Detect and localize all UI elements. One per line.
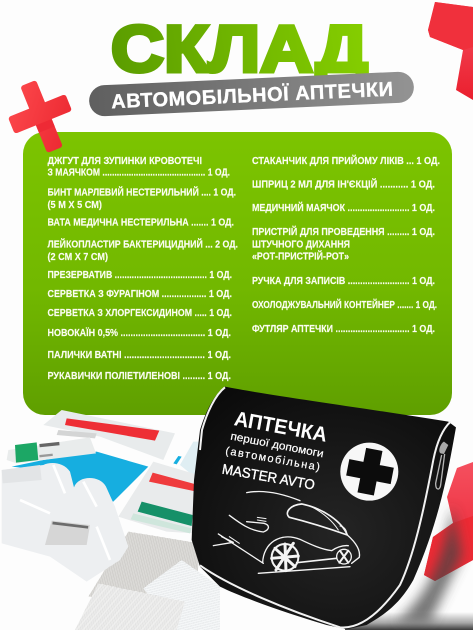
small package — [180, 442, 208, 480]
item: plaster: (2 СМ Х 7 СМ) — [48, 252, 108, 263]
item: medicine cup: СТАКАНЧИК ДЛЯ ПРИЙОМУ ЛІКІВ ... 1 ОД. — [252, 154, 440, 167]
bag body — [192, 387, 456, 629]
icon: red cross top right — [428, 2, 473, 100]
item: medical beacon: МЕДИЧНИЙ МАЯЧОК ......................... 1 ОД. — [252, 201, 435, 214]
item: resuscitation device: ПРИСТРІЙ ДЛЯ ПРОВЕДЕННЯ ......... 1 ОД. — [252, 225, 435, 238]
item: novocaine: НОВОКАЇН 0,5% .................................. 1 ОД. — [48, 326, 231, 339]
paper: instructions back — [88, 532, 200, 600]
icon: medical cross circle — [340, 443, 398, 501]
item: tourniquet — [48, 156, 230, 178]
item: pen: РУЧКА ДЛЯ ЗАПИСІВ ......................... 1 ОД. — [252, 276, 435, 287]
text block: right column — [252, 154, 440, 335]
title: СКЛАД — [111, 12, 368, 86]
item: syringe: ШПРИЦ 2 МЛ ДЛЯ ІН'ЄКЦІЙ ........... 1 ОД. — [252, 178, 435, 190]
item: gloves: РУКАВИЧКИ ПОЛІЕТИЛЕНОВІ ......... 1 ОД. — [48, 371, 231, 382]
illustration: first aid bag — [192, 387, 456, 629]
item: cotton wool: ВАТА МЕДИЧНА НЕСТЕРИЛЬНА ....... 1 ОД. — [48, 218, 234, 228]
illustration: kit contents — [2, 410, 220, 630]
item: tourniquet: З МАЯЧКОМ ........................................... 1 ОД. — [48, 168, 230, 178]
bag brand: MASTER AVTO — [221, 461, 316, 493]
item: chlorhexidine wipe: СЕРВЕТКА З ХЛОРГЕКСИДИНОМ ..... 1 ОД. — [48, 308, 232, 319]
gloves — [2, 463, 128, 582]
bag subheading: першої допомоги — [229, 430, 325, 460]
blue tab — [173, 456, 182, 464]
item: resuscitation device: ШТУЧНОГО ДИХАННЯ — [252, 240, 350, 250]
zipper pull — [436, 442, 448, 489]
item: gauze bandage — [48, 186, 236, 211]
item: case: ФУТЛЯР АПТЕЧКИ .............................. 1 ОД. — [252, 324, 435, 335]
subtitle pill: АВТОМОБІЛЬНОЇ АПТЕЧКИ — [111, 78, 393, 113]
panel: green contents list — [23, 132, 452, 415]
item: gauze bandage: (5 М Х 5 СМ) — [48, 200, 102, 211]
item: condom: ПРЕЗЕРВАТИВ ...................................... 1 ОД. — [48, 270, 232, 281]
package: red and green wipes — [118, 462, 198, 533]
bottom shadow band — [345, 612, 473, 630]
bandage package — [7, 437, 96, 463]
paper: instructions front — [75, 583, 185, 630]
item: gauze bandage: БИНТ МАРЛЕВИЙ НЕСТЕРИЛЬНИЙ .... 1 ОД. — [48, 186, 236, 198]
illustration: car — [213, 492, 360, 573]
paper: form — [143, 560, 220, 630]
item: plaster: ЛЕЙКОПЛАСТИР БАКТЕРИЦИДНИЙ ... 2 ОД. — [48, 238, 238, 250]
item: resuscitation device — [252, 225, 435, 262]
icon: red cross top left — [0, 72, 83, 162]
item: cotton swabs: ПАЛИЧКИ ВАТНІ ................................ 1 ОД. — [48, 350, 231, 361]
bag heading: АПТЕЧКА — [232, 407, 329, 447]
text block: left column — [48, 156, 238, 382]
blue sheet — [12, 452, 148, 502]
bag type: (автомобільна) — [224, 445, 321, 474]
item: tourniquet: ДЖГУТ ДЛЯ ЗУПИНКИ КРОВОТЕЧІ — [48, 156, 202, 167]
item: furagin wipe: СЕРВЕТКА З ФУРАГІНОМ .................. 1 ОД. — [48, 289, 232, 300]
package: red strip wipe — [43, 410, 175, 460]
white piping — [200, 387, 451, 627]
bag shadow — [395, 505, 462, 622]
icon: red cross bottom right — [424, 462, 473, 581]
item: plaster — [48, 238, 238, 263]
subtitle pill — [88, 71, 415, 117]
item: resuscitation device: «РОТ-ПРИСТРІЙ-РОТ» — [252, 250, 349, 262]
